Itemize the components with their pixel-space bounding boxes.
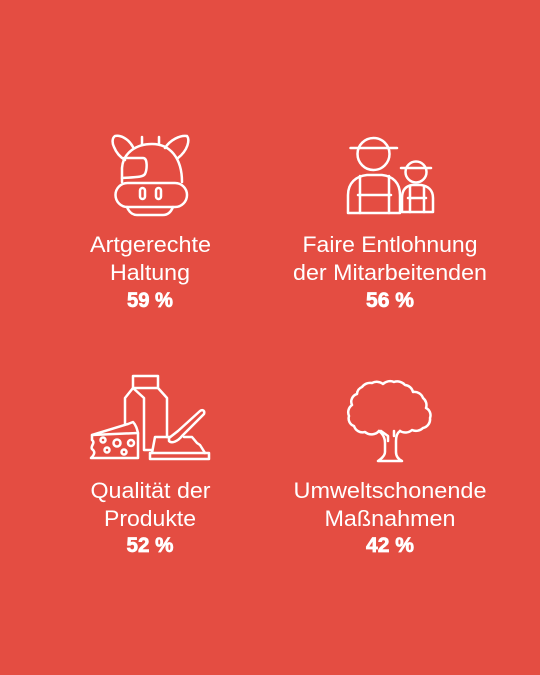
panel: Umweltschonende Maßnahmen: [294, 381, 486, 557]
text: value: 56 %: [366, 289, 414, 312]
icon: tree: [348, 381, 431, 461]
icon: dairy products: [91, 376, 209, 459]
text: label: Qualität der: [90, 478, 210, 503]
text: label line 2: Maßnahmen: [324, 506, 456, 531]
icon: cow: [113, 136, 188, 215]
panel: Faire Entlohnung: [293, 138, 487, 312]
text: label line 2: Produkte: [104, 506, 196, 531]
text: label: Artgerechte: [90, 232, 211, 257]
panel: Artgerechte Haltung: [90, 136, 211, 312]
icon: farmers: [348, 138, 433, 213]
text: value: 42 %: [366, 534, 414, 557]
text: value: 52 %: [126, 534, 174, 557]
text: label line 2: der Mitarbeitenden: [293, 260, 487, 285]
text: value: 59 %: [127, 289, 173, 312]
text: label: Umweltschonende: [294, 478, 486, 503]
panel: Qualität der Produkte: [90, 376, 210, 557]
text: label: Faire Entlohnung: [302, 232, 478, 257]
text: label line 2: Haltung: [110, 260, 190, 285]
